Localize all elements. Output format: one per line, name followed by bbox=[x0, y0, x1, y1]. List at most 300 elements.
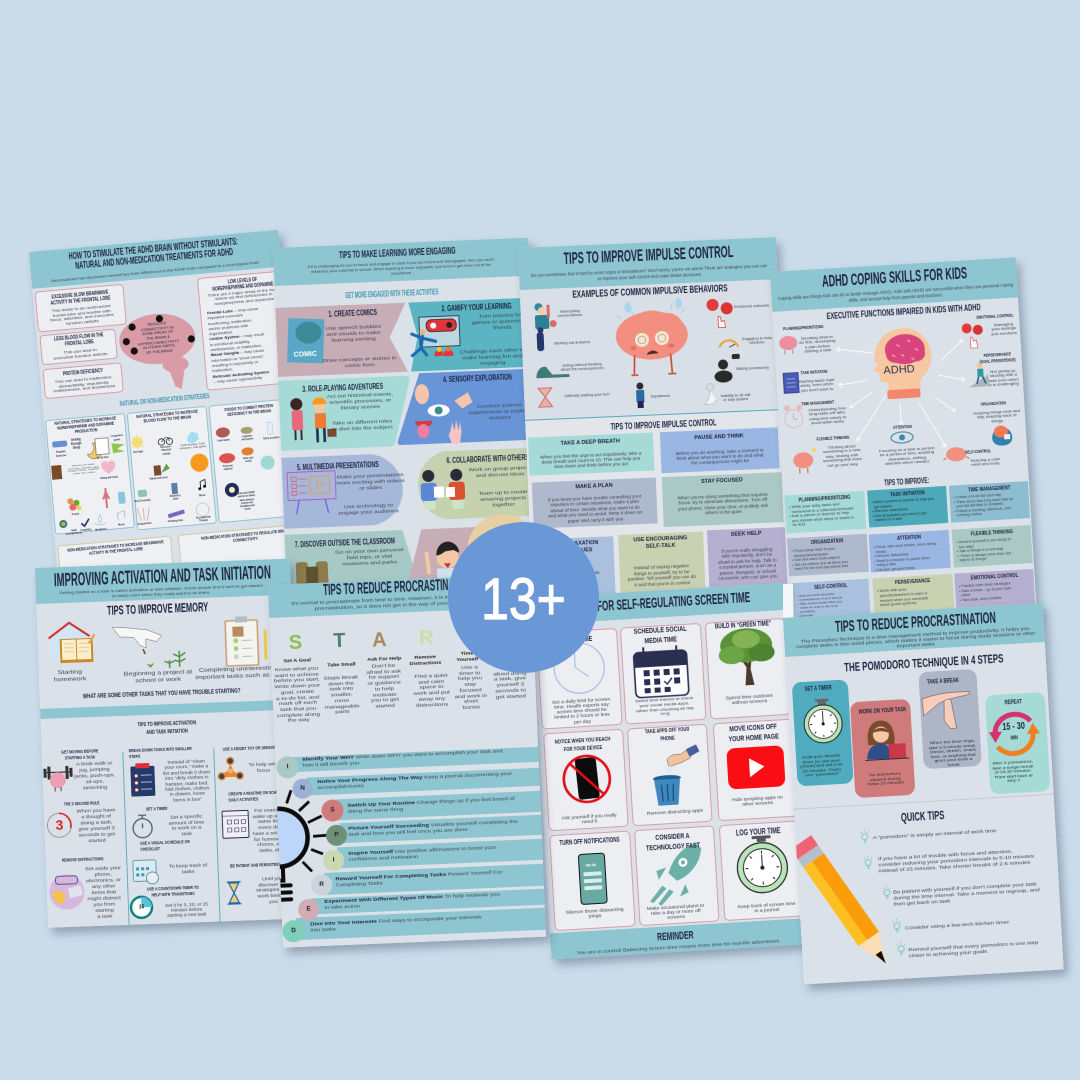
tip: emotional control: place bbox=[961, 593, 971, 597]
page: self-regulating screen time: Keep track of screen time bbox=[738, 901, 796, 909]
page: make learning more engaging: Turn lessons into bbox=[479, 313, 525, 320]
icons: panel one bbox=[49, 435, 131, 529]
page: pomodoro technique: After 4 pomodoros, bbox=[992, 760, 1033, 766]
tip: seek help: afraid to ask for help. Talk to bbox=[718, 557, 777, 565]
page: pomodoro technique: TAKE A BREAK bbox=[927, 677, 959, 686]
tip: make a plan bbox=[532, 477, 658, 529]
header bbox=[268, 574, 532, 618]
activity 7 text bbox=[294, 535, 404, 567]
card: low levels of norepinephrine: functioning, inattention, bbox=[208, 317, 252, 326]
step: take a break bbox=[918, 669, 982, 769]
page shadow: procrastination star sheet bbox=[268, 574, 546, 948]
page: make learning more engaging: to dive into the subject bbox=[332, 425, 393, 433]
illustrations bbox=[534, 298, 740, 408]
tip: stay focused: others to be quiet bbox=[705, 509, 742, 516]
page: tips to reduce procrastination: task that you bbox=[280, 706, 316, 713]
tip: emotional control: • Take slow, deep breaths bbox=[960, 596, 1002, 602]
page: improving activation and task initiation: stretching bbox=[83, 785, 107, 791]
page: improving activation and task initiation: strategies that bbox=[256, 887, 290, 893]
panel: foods bbox=[208, 398, 309, 523]
icon: dizzy brain bbox=[614, 297, 689, 376]
card: low levels of norepinephrine: Reticular Activating System bbox=[213, 369, 269, 379]
page: how to stimulate the ADHD brain: Legumes bbox=[242, 433, 252, 438]
tip: relaxation techniques: TECHNIQUES bbox=[557, 547, 593, 555]
page: improving activation and task initiation: any other bbox=[92, 884, 116, 890]
page: pomodoro technique: of 15-30 minutes. bbox=[995, 769, 1032, 775]
heading: quick tips: QUICK TIPS bbox=[901, 810, 945, 825]
page: how to stimulate the ADHD brain: and pulses bbox=[241, 437, 254, 442]
page: how to stimulate the ADHD brain: Acupuncture bbox=[137, 520, 152, 526]
page: improve impulse control: or stay seated bbox=[723, 398, 748, 403]
page: tips to reduce procrastination: Find a quiet bbox=[414, 673, 448, 680]
page: make learning more engaging: 4. SENSORY EXPLORATION bbox=[443, 371, 512, 384]
page: improving activation and task initiation: THE 3 SECOND RULE bbox=[64, 800, 100, 807]
tip: seek help: If you're really struggling bbox=[721, 546, 772, 554]
memory captions bbox=[54, 665, 293, 684]
page: make learning more engaging: literary scenes bbox=[341, 405, 380, 411]
page: pomodoro technique: Consider using a low-tech kitchen timer bbox=[905, 920, 1009, 931]
activity 4 text bbox=[443, 371, 531, 421]
card: less blood flow bbox=[39, 329, 118, 365]
tip: stay focused: your phone, close your door, or politely ask bbox=[678, 503, 768, 512]
header bbox=[273, 238, 529, 286]
badge number: 13+ bbox=[481, 567, 566, 632]
tip: planning: do first bbox=[792, 523, 805, 527]
page: tips to reduce procrastination: short bbox=[464, 700, 478, 705]
page: ADHD coping skills for kids: away, even when bbox=[800, 382, 833, 388]
tip: self-control: SELF-CONTROL bbox=[814, 583, 848, 591]
page: ADHD coping skills for kids: Starting tasks right bbox=[799, 378, 834, 384]
page: self-regulating screen time: time. Health experts say bbox=[554, 702, 609, 710]
page: tips to reduce procrastination: distractions bbox=[416, 702, 448, 708]
icon: brain bbox=[117, 311, 200, 394]
page: pomodoro technique: Dance, stretch, snack bbox=[930, 748, 976, 754]
icon: hourglass bbox=[227, 882, 241, 904]
tip: flexible thinking bbox=[952, 525, 1033, 568]
icon: stopwatch bbox=[803, 698, 843, 744]
page: tips to reduce procrastination: to help bbox=[375, 687, 394, 693]
page: improving activation and task initiation: to work on a bbox=[172, 825, 201, 831]
memory icons bbox=[48, 616, 268, 668]
page: improve impulse control: Impatience bbox=[651, 394, 670, 398]
page: tips to reduce procrastination: Use a bbox=[461, 665, 478, 671]
activity 1 text bbox=[294, 307, 397, 369]
card: slow brainwave activity: focus, attention, and executive bbox=[50, 313, 114, 322]
card: slow brainwave activity: EXCESSIVE SLOW BRAINWAVE bbox=[51, 290, 109, 301]
page: improving activation and task initiation bbox=[35, 559, 303, 928]
examples section background bbox=[520, 279, 783, 420]
card: protein deficiency: restlessness, and drowsiness bbox=[53, 384, 115, 394]
tip: organization: ORGANIZATION bbox=[811, 538, 844, 546]
column 2 text bbox=[128, 746, 210, 918]
card text row 2 bbox=[554, 722, 783, 824]
page: self-regulating screen time: Remove distracting apps bbox=[647, 808, 703, 816]
page: ADHD coping skills for kids: a plan before bbox=[805, 344, 830, 349]
page: how to stimulate the ADHD brain: Lean meats bbox=[217, 437, 230, 442]
tip: seek help bbox=[707, 527, 788, 594]
page: tips to reduce procrastination: and work in bbox=[455, 694, 487, 700]
tip: task initiation bbox=[867, 486, 948, 528]
icon: clipboard checklist bbox=[225, 616, 268, 666]
tip: relaxation techniques: breathing, mindfulness bbox=[552, 570, 600, 577]
page: improving activation and task initiation: seconds to get bbox=[78, 832, 115, 839]
card: low levels of norepinephrine: Limbic System – may result bbox=[209, 332, 264, 342]
page: self-regulating screen time bbox=[530, 583, 807, 959]
page: ADHD coping skills for kids: tidy, keeping track of bbox=[977, 413, 1017, 420]
panel three text bbox=[217, 403, 280, 511]
page: pomodoro technique: instead of 25 minutes. Take shorter breaks of 2-5 minutes bbox=[879, 859, 1031, 873]
page: improving activation and task initiation: fold clothes, clothes bbox=[165, 785, 209, 792]
icons and brain illustration bbox=[51, 314, 275, 528]
page: tips to reduce procrastination: Know what you bbox=[275, 666, 318, 673]
step: repeat bbox=[985, 692, 1050, 794]
page: make learning more engaging: 5. MULTIMEDIA PRESENTATIONS bbox=[297, 459, 379, 472]
page: improving activation and task initiation: CREATE A ROUTINE OR SCHEDULE bbox=[228, 789, 288, 797]
card: low levels of norepinephrine: resulting in impulsivity or bbox=[212, 359, 258, 368]
page: improving activation and task initiation: might distract bbox=[87, 896, 121, 902]
page: tips to reduce procrastination: afraid to ask bbox=[366, 669, 401, 676]
tip: attention: • Focus, take short breaks, move during bbox=[873, 542, 936, 549]
tip: attention: breaks bbox=[876, 549, 887, 554]
page: improving activation and task initiation: A brisk walk or bbox=[76, 761, 112, 768]
page: improving activation and task initiation: Until you bbox=[262, 876, 283, 882]
page: tips to reduce procrastination: Distractions bbox=[409, 661, 441, 667]
page: improving activation and task initiation: minutes before bbox=[171, 907, 202, 913]
page: how to stimulate the ADHD brain: protein-rich bbox=[241, 501, 253, 505]
page: ADHD coping skills for kids: Understanding how bbox=[809, 406, 846, 412]
page: pomodoro technique: If you have a lot of trouble with focus and attention, bbox=[878, 848, 1013, 861]
page: how to stimulate the ADHD brain: goals bbox=[114, 437, 120, 441]
tip: make a plan: impulses in certain situations, make a plan bbox=[550, 499, 639, 508]
tip: perseverance: reward when you complete bbox=[880, 596, 929, 603]
tip: task initiation: TASK INITIATION bbox=[890, 490, 925, 498]
tip: perseverance: PERSEVERANCE bbox=[895, 578, 930, 586]
header bbox=[770, 257, 1018, 312]
page: pomodoro technique: A “pomodoro” is simply an interval of work time bbox=[873, 828, 997, 840]
tip: self-control: consequences of your actions bbox=[799, 595, 842, 602]
column 1 text bbox=[61, 748, 122, 920]
page: ADHD coping skills for kids: distractions, shifting bbox=[888, 455, 926, 461]
page: make learning more engaging: comic form bbox=[345, 363, 375, 369]
page: pomodoro technique: Then start back at bbox=[994, 773, 1033, 779]
bottom panel titles bbox=[67, 528, 289, 556]
page: improve impulse control: Acting without thinking bbox=[562, 362, 602, 368]
tip: seek help: a trusted person, such as a bbox=[719, 562, 776, 570]
tip: flexible thinking: • “There is always more than one bbox=[957, 551, 1011, 558]
card: set a time limit bbox=[536, 628, 623, 730]
icon: reading girl bbox=[863, 719, 909, 760]
page: how to stimulate the ADHD brain: DEFICIENCY IN THE BRAIN bbox=[227, 408, 271, 417]
activity 3 text bbox=[302, 381, 393, 433]
page: how to stimulate the ADHD brain: NATURAL STRATEGIES TO INCREASE bbox=[136, 409, 198, 419]
page: improve impulse control: conversations bbox=[558, 313, 582, 318]
card: protein deficiency bbox=[42, 362, 124, 399]
page: tips to reduce procrastination: timer to bbox=[459, 671, 481, 677]
card: low levels of norepinephrine: There are 4 major areas of the brain bbox=[207, 287, 279, 298]
page: ADHD coping skills for kids: something in a new bbox=[823, 448, 860, 455]
page: make learning more engaging: engage your audience bbox=[338, 509, 399, 517]
teal divider band bbox=[40, 700, 295, 719]
tip: flexible thinking: FLEXIBLE THINKING bbox=[971, 529, 1013, 537]
card: slow brainwave activity bbox=[35, 284, 127, 333]
tip: self-control: • Exercise bbox=[798, 613, 813, 618]
page: ADHD coping skills for kids: you don't want to bbox=[801, 387, 833, 393]
page: pomodoro technique: Be patient with yourself if you don't complete your task bbox=[893, 881, 1037, 894]
panel: strategies norepinephrine bbox=[45, 413, 135, 535]
page shadow: engaging sheet bbox=[273, 238, 542, 593]
heading: activation tips: AND TASK INITIATION bbox=[146, 729, 188, 736]
header: Getting started on a task is called activation or task initiation. Some people find it hard to get started bbox=[59, 583, 263, 595]
page: make learning more engaging: 7. DISCOVER OUTSIDE THE CLASSROOM bbox=[295, 535, 395, 549]
page: make learning more engaging: friends bbox=[493, 325, 512, 331]
page: improving activation and task initiation: starting bbox=[95, 908, 114, 914]
page: ADHD coping skills for kids: EMOTIONAL CONTROL bbox=[976, 313, 1014, 320]
page: self-regulating screen time: take a day or more off bbox=[651, 908, 701, 916]
tip: self-control: • Stop and think about the bbox=[797, 592, 834, 598]
page: improve impulse control: Blurting out answers bbox=[554, 340, 590, 345]
page: pomodoro technique: break bbox=[948, 762, 960, 767]
page: improving activation and task initiation: To keep track of bbox=[169, 862, 207, 869]
page: tips to reduce procrastination: help you bbox=[458, 677, 482, 683]
tip: attention: • Remove distractions bbox=[874, 552, 909, 558]
page: tips to reduce procrastination: complete along bbox=[277, 712, 320, 719]
icon: presentation board bbox=[287, 471, 337, 515]
brain caption: IN OTHER PARTS bbox=[143, 343, 175, 350]
icon: repeat arrows bbox=[988, 713, 1041, 755]
card text row 3 bbox=[559, 826, 796, 920]
page shadow: impulse sheet bbox=[518, 237, 791, 600]
page: tips to reduce procrastination: Steps Break bbox=[324, 675, 358, 682]
icon: fidget spinner bbox=[218, 757, 243, 780]
page: improving activation and task initiation: amount of time bbox=[169, 819, 204, 826]
tip: planning bbox=[784, 491, 866, 533]
page: self-regulating screen time: screen time should be bbox=[557, 707, 607, 715]
page: improving activation and task initiation: you bbox=[269, 899, 278, 904]
page: tips to reduce procrastination: A bbox=[372, 629, 387, 651]
page: improve impulse control bbox=[518, 237, 791, 600]
page: self-regulating screen time: CONSIDER A bbox=[655, 831, 690, 842]
page: self-regulating screen time: FOR YOUR DEVICE bbox=[564, 745, 603, 753]
page: ADHD coping skills for kids: way, dealing with bbox=[826, 453, 858, 459]
page: tips to reduce procrastination: you bbox=[504, 666, 515, 671]
page: how to stimulate the ADHD brain: ACTIVITY IN THE FRONTAL LOBE bbox=[89, 546, 143, 556]
page: self-regulating screen time: limited to 2 hours or less bbox=[554, 712, 610, 720]
card: low levels of norepinephrine: organization. bbox=[209, 329, 234, 337]
header bbox=[29, 230, 281, 289]
card: green time bbox=[705, 618, 790, 720]
page: self-regulating screen time: Ask yourself if you really bbox=[561, 812, 617, 820]
page: how to stimulate the ADHD brain: Tyrosine-rich foods bbox=[72, 464, 95, 468]
page shadow: coping sheet bbox=[770, 257, 1037, 629]
step icons bbox=[804, 690, 1040, 761]
page: tips to reduce procrastination: Picture Yourself Succeeding Visualize yourself completing the bbox=[348, 820, 518, 832]
header: Neuroscience has discovered several key brain differences in the ADHD brain compared to a neurotypical brain bbox=[51, 261, 259, 283]
page: make learning more engaging: Draw concepts or stories in bbox=[323, 356, 397, 364]
tip: encouraging self-talk: positive. Tell yourself you can do bbox=[628, 574, 696, 582]
15: 15 bbox=[139, 904, 144, 910]
page: make learning more engaging: Go on your own personal bbox=[335, 548, 404, 556]
activity 5 text bbox=[296, 459, 405, 517]
card: move icons bbox=[713, 719, 799, 821]
tip: encouraging self-talk: things to yourself, try to be bbox=[634, 569, 690, 576]
page: tips to reduce procrastination: a to-do list, and bbox=[276, 695, 320, 702]
page: make learning more engaging: Take on different roles bbox=[332, 419, 392, 427]
section heading: natural strategies: NATURAL OR NON-MEDICATION STRATEGIES bbox=[120, 393, 210, 408]
page: make learning more engaging: Challenge each other to bbox=[460, 348, 525, 356]
page: improving activation and task initiation: tasks bbox=[182, 868, 195, 874]
page: tips to reduce procrastination: more bbox=[335, 699, 349, 704]
heading: activation tips bbox=[137, 720, 196, 736]
card: low levels of norepinephrine: information to “short-circuit,” bbox=[211, 353, 265, 363]
page: pomodoro technique: When the timer rings, bbox=[930, 739, 975, 745]
page: improving activation and task initiation: Completing uninteresting but bbox=[199, 665, 289, 674]
page: ADHD coping skills for kids: it is challenging bbox=[989, 382, 1019, 388]
brain caption bbox=[138, 321, 179, 355]
card: low levels of norepinephrine bbox=[197, 270, 299, 391]
icon: play button bbox=[726, 745, 786, 790]
page: improving activation and task initiation: homework bbox=[54, 676, 87, 683]
page: self-regulating screen time: Make occasional plans to bbox=[647, 903, 704, 911]
tip: pause and think: think about what you want to do and what bbox=[676, 452, 764, 461]
page: improving activation and task initiation: into “dirty clothes in bbox=[165, 774, 209, 781]
card: slow brainwave activity: This leads to an underactive bbox=[51, 304, 111, 313]
header: The Pomodoro Technique is a time management method to improve productivity. It helps you bbox=[801, 626, 1030, 644]
page: improving activation and task initiation: HELP WITH TRANSITIONS bbox=[151, 890, 195, 897]
page: self-regulating screen time: need it bbox=[582, 818, 597, 824]
page: how to stimulate the ADHD brain: NOREPINEPHRINE AND DOPAMINE bbox=[57, 421, 114, 431]
tip: take a deep breath bbox=[528, 433, 654, 476]
page: self-regulating screen time: other screens bbox=[742, 800, 773, 807]
icon: countdown timer bbox=[131, 896, 152, 918]
brain caption: OF THE BRAIN bbox=[146, 348, 173, 355]
page: make learning more engaging: experiments or explore bbox=[469, 409, 531, 416]
card: low levels of norepinephrine: Basal Ganglia – may cause bbox=[211, 348, 265, 358]
header: maximize your potential in school. When learning is more enjoyable, you tend to get more out of the bbox=[311, 263, 491, 274]
tip: organization: backpack/workspace bbox=[794, 552, 828, 558]
function labels bbox=[783, 313, 1020, 468]
page: tips to reduce procrastination: Take Small bbox=[327, 662, 356, 669]
page: make learning more engaging: Act out historical events, bbox=[327, 392, 393, 400]
page: how to stimulate the ADHD brain: accomplishments bbox=[66, 531, 83, 536]
badge: 13+ bbox=[448, 522, 599, 673]
page: how to stimulate the ADHD brain: NON-MEDICATION STRATEGIES TO REGULATE BRAIN bbox=[201, 528, 289, 541]
page: tips to reduce procrastination: Inspire Yourself Use positive affirmations to boost your bbox=[348, 846, 496, 857]
tip: organization bbox=[787, 534, 869, 576]
page: self-regulating screen time: SCHEDULE SOCIAL bbox=[633, 624, 687, 636]
page: improve impulse control: Difficulty waiting your turn bbox=[565, 392, 610, 398]
page: improving activation and task initiation: Set a specific bbox=[170, 814, 202, 820]
page: tips to reduce procrastination: space to bbox=[419, 685, 444, 691]
page: self-regulating screen time: REMINDER bbox=[657, 929, 694, 943]
page: pomodoro technique: then get back on task bbox=[893, 898, 950, 906]
heading: tips to improve memory: TIPS TO IMPROVE MEMORY bbox=[107, 600, 208, 618]
icon: light bulb bbox=[248, 789, 330, 901]
card: log time bbox=[719, 820, 806, 921]
page: make learning more engaging: Make your presentations bbox=[337, 473, 404, 481]
card: less blood flow: This can lead to bbox=[63, 348, 97, 355]
page: tips to reduce procrastination: Set A Goal bbox=[283, 658, 311, 664]
panel: connectivity strategies bbox=[178, 523, 312, 585]
page: improving activation and task initiation: chores, and bbox=[257, 841, 285, 848]
page: tips to reduce procrastination: Notice Your Progress Along The Way Keep a journal documenting your bbox=[317, 772, 512, 785]
page: pomodoro technique: REPEAT bbox=[1004, 699, 1022, 707]
page shadow: pomodoro sheet bbox=[783, 603, 1064, 984]
page: make learning more engaging: 2. GAMIFY YOUR LEARNING bbox=[441, 300, 512, 313]
page: ADHD coping skills for kids: something that does bbox=[823, 457, 862, 463]
icon: pointing boy bbox=[426, 541, 462, 589]
page: how to stimulate the ADHD brain: Blueberry bbox=[170, 493, 181, 498]
icon: routine calendar bbox=[222, 810, 249, 838]
page: improving activation and task initiation: important tasks such as chores bbox=[195, 672, 293, 681]
header: TIPS TO REDUCE PROCRASTINATION bbox=[323, 576, 474, 599]
page: pomodoro technique: 25 minutes. That's bbox=[802, 767, 841, 773]
tip: flexible thinking: way to do things” bbox=[959, 557, 987, 563]
tip: time management: • Create a to-do list each day bbox=[954, 493, 1001, 499]
tip: pause and think bbox=[660, 427, 779, 473]
header: ADHD COPING SKILLS FOR KIDS bbox=[822, 264, 968, 291]
header: Coping skills are things kids can do to better manage ADHD. Kids with ADHD are successful when they use personal coping bbox=[778, 282, 1013, 301]
page: how to stimulate the ADHD brain: Juice bbox=[172, 497, 179, 501]
page: ADHD coping skills for kids: sticking with a bbox=[990, 373, 1017, 379]
heading: tips: TIPS TO IMPROVE IMPULSE CONTROL bbox=[610, 417, 717, 432]
icon: role-play kids bbox=[290, 397, 337, 443]
page: pomodoro technique: MIN bbox=[1011, 735, 1018, 742]
card icons bbox=[554, 628, 788, 906]
brain caption: CONNECTIVITY IN bbox=[141, 325, 174, 332]
tip: stay focused: When you're doing something that requires bbox=[677, 492, 768, 501]
page: how to stimulate the ADHD brain: lunch bbox=[245, 508, 251, 511]
page: tips to reduce procrastination: Ask For Help bbox=[367, 657, 401, 663]
page: how to stimulate the ADHD brain: Chewing Gum bbox=[168, 518, 183, 523]
panel two text bbox=[133, 409, 211, 526]
card: low levels of norepinephrine: impaired executive bbox=[207, 313, 243, 321]
tip: relaxation techniques: Practice deep bbox=[561, 565, 590, 571]
page: make learning more engaging bbox=[273, 238, 542, 593]
card: slow brainwave activity: function deficits bbox=[66, 319, 99, 326]
card: take apps off bbox=[627, 724, 713, 826]
page: improving activation and task initiation: have a set time bbox=[253, 830, 289, 836]
column art bbox=[43, 748, 250, 925]
icon: senses bbox=[414, 382, 474, 445]
page: how to stimulate the ADHD brain: Omega-3 foods, sunflower bbox=[68, 469, 100, 473]
page: tips to reduce procrastination: get started bbox=[496, 694, 526, 700]
page: improving activation and task initiation: electronics, or bbox=[86, 878, 121, 884]
card: notice bbox=[543, 729, 629, 831]
page: self-regulating screen time: in a journal bbox=[754, 907, 780, 913]
page: tips to reduce procrastination: work and put bbox=[413, 690, 450, 697]
page: improving activation and task initiation: USE A VISUAL SCHEDULE OR bbox=[140, 839, 190, 846]
page: improving activation and task initiation: Set it for 5, 10, or 15 bbox=[165, 901, 208, 908]
page: improve impulse control: behavior bbox=[750, 341, 765, 345]
brain caption: HYPERCONNECTIVITY bbox=[138, 338, 179, 346]
page: pomodoro technique: timer (or use your bbox=[802, 758, 840, 764]
page: self-regulating screen time: rather than checking all day bbox=[636, 704, 694, 713]
page: pomodoro technique: time, or anything that bbox=[931, 752, 976, 759]
header: NATURAL AND NON-MEDICATION TREATMENTS FOR ADHD bbox=[75, 247, 234, 272]
page: ADHD coping skills for kids: FLEXIBLE THINKING bbox=[816, 435, 850, 442]
page: improving activation and task initiation: a thought of bbox=[81, 814, 111, 820]
page: tips to reduce procrastination: N bbox=[300, 785, 305, 792]
icon: checklist bbox=[130, 763, 155, 797]
reminder text bbox=[577, 929, 779, 955]
tip: make a plan: If you know you have trouble controlling your bbox=[548, 494, 641, 502]
page: make learning more engaging: and visuals to make bbox=[326, 331, 381, 338]
panel: brainwave strategies bbox=[57, 536, 175, 595]
page: self-regulating screen time: Hide tempting apps on bbox=[732, 794, 783, 802]
tip: task initiation: started on a task bbox=[875, 517, 902, 522]
tip: make a plan: MAKE A PLAN bbox=[575, 483, 613, 490]
page: improving activation and task initiation: list and break it down bbox=[163, 769, 210, 776]
